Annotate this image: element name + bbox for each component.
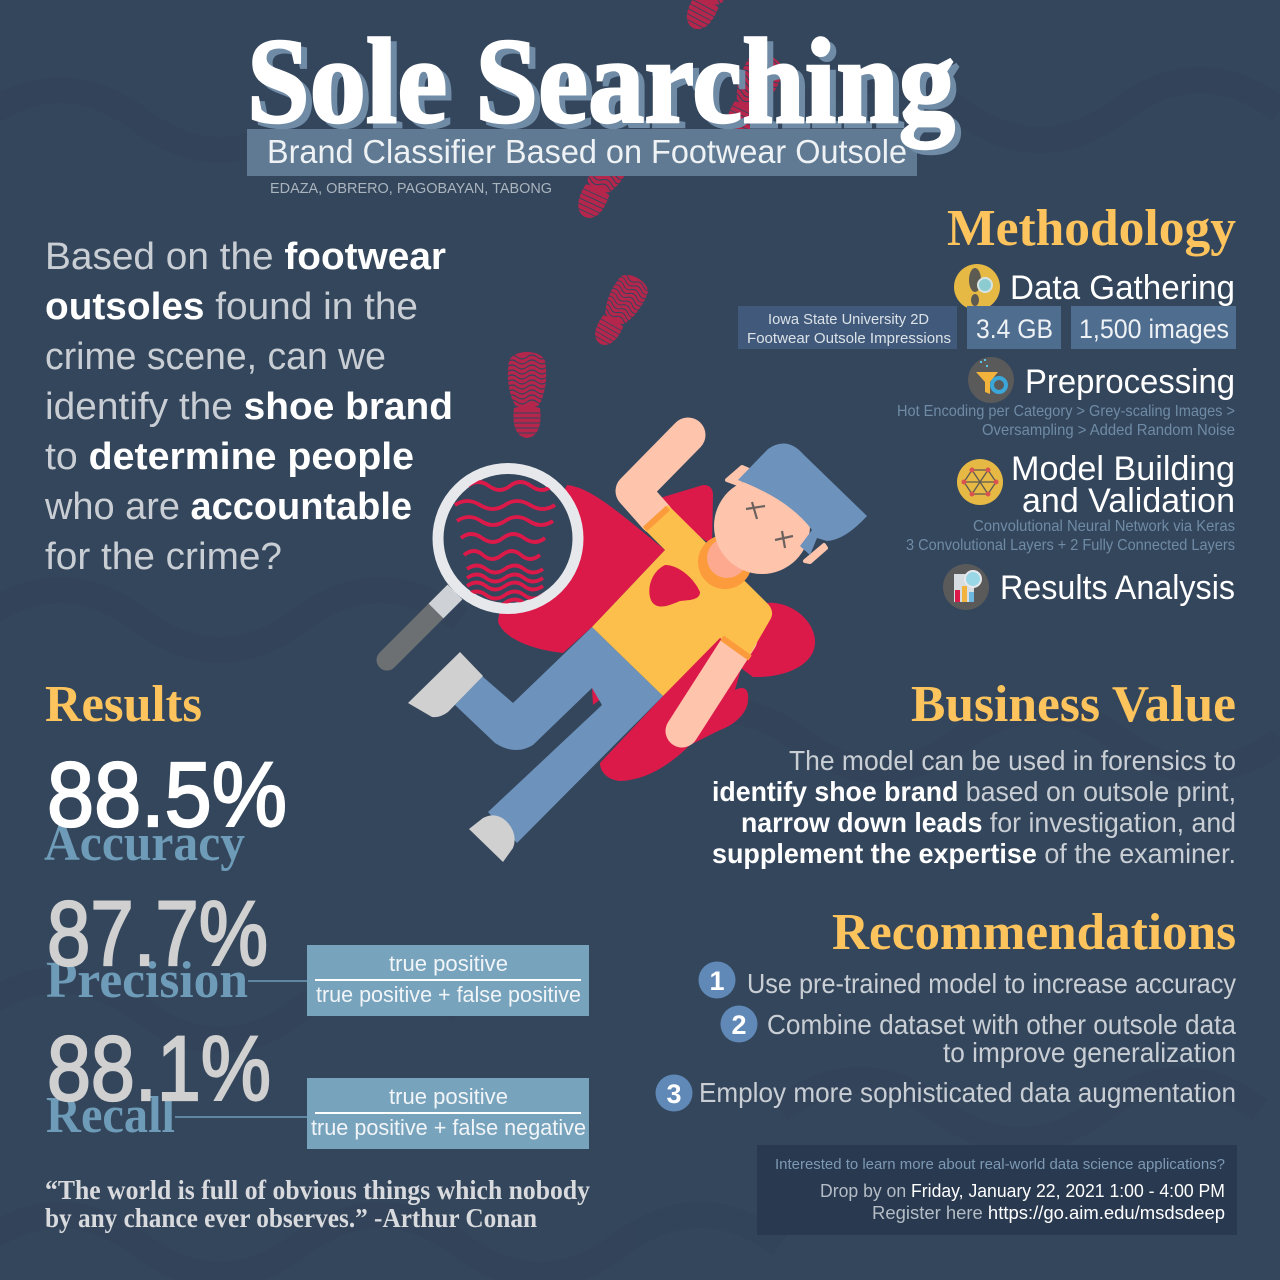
quote: “The world is full of obvious things which nobody [45,1175,590,1205]
step: data gathering: Data Gathering [1010,269,1235,307]
business value text: identify shoe brand based on outsole print, [712,776,1236,807]
metric: accuracy: Accuracy [44,815,245,872]
dataset source box: Iowa State University 2D [768,311,929,328]
legs [455,627,663,843]
recommendation 2: 2 [731,1010,747,1040]
dataset source box [738,306,957,349]
preprocessing details: Oversampling > Added Random Noise [982,422,1235,439]
neck [707,538,747,578]
model details: Convolutional Neural Network via Keras [973,518,1235,535]
recall formula [307,1078,589,1149]
sleeve cuffs [645,508,750,658]
recall connector [175,1116,307,1118]
dataset size box [967,306,1061,349]
dataset count box [1071,306,1236,349]
dataset size box: 3.4 GB [976,314,1053,344]
metric: recall: 88.1% [47,1018,271,1120]
precision formula: true positive [389,951,508,976]
quote: by any chance ever observes.” -Arthur Conan [45,1203,537,1233]
step: preprocessing: Preprocessing [1025,363,1235,401]
step: model building: Model Building [1011,450,1235,488]
recommendation 3: 3 [666,1079,682,1109]
icon: chart and lens [943,564,989,610]
heading: business value: Business Value [911,676,1236,733]
blood stain [649,565,700,607]
subtitle: Brand Classifier Based on Footwear Outsole [267,133,907,170]
research question [44,236,453,578]
precision connector [248,980,307,982]
heading: methodology: Methodology [947,200,1236,257]
authors: EDAZA, OBRERO, PAGOBAYAN, TABONG [270,180,552,197]
subtitle band [247,129,917,176]
event callout: Interested to learn more about real-world data science applications? [775,1156,1225,1173]
illustration: victim and blood [408,435,867,862]
research question: identify the shoe brand [45,386,453,428]
recommendation 2 [720,1006,1236,1068]
event callout: Register here https://go.aim.edu/msdsdeep [872,1203,1225,1223]
magnifying glass [387,468,578,660]
metric: precision: 87.7% [47,883,268,985]
recommendation 1: 1 [709,966,725,996]
shirt [592,505,772,696]
business value text: narrow down leads for investigation, and [741,807,1236,838]
title: Sole Searching [247,14,955,149]
dataset source box: Footwear Outsole Impressions [747,330,951,347]
hair [738,444,867,555]
recommendation 2: Combine dataset with other outsole data [767,1009,1236,1040]
model details: 3 Convolutional Layers + 2 Fully Connected Layers [906,537,1235,554]
research question: who are accountable [44,486,412,528]
step: model building: and Validation [1022,482,1235,520]
precision formula: true positive + false positive [316,982,581,1007]
business value text: supplement the expertise of the examiner. [712,838,1236,869]
step: model building [1011,450,1235,520]
business value text: The model can be used in forensics to [789,745,1236,776]
research question: for the crime? [45,536,282,578]
research question: Based on the footwear [45,236,446,278]
head [714,478,810,574]
lower arm [682,639,741,731]
recommendation 3: Employ more sophisticated data augmentation [699,1077,1236,1108]
precision formula [307,945,589,1016]
title: Sole Searching [253,19,961,154]
business value text [712,745,1236,869]
model details [906,518,1235,554]
metric: recall: Recall [46,1087,175,1144]
raised arm [633,435,688,517]
event callout: Drop by on Friday, January 22, 2021 1:00 - 4:00 PM [820,1181,1225,1201]
step: results analysis: Results Analysis [1000,569,1235,607]
recall formula: true positive [389,1084,508,1109]
footprints trail [507,0,788,438]
metric: precision: Precision [46,952,248,1009]
research question: crime scene, can we [45,336,386,378]
collar [698,535,752,589]
eyes [746,502,793,548]
event callout [757,1145,1237,1235]
recall formula: true positive + false negative [311,1115,586,1140]
ears [727,467,826,562]
recommendation 2: to improve generalization [943,1037,1236,1068]
icon: neural network [957,459,1003,505]
heading: recommendations: Recommendations [832,904,1236,961]
recommendation 1: Use pre-trained model to increase accuracy [747,968,1236,999]
shoes [408,652,483,717]
dataset count box: 1,500 images [1079,314,1229,344]
preprocessing details [897,403,1235,439]
heading: results: Results [45,676,202,733]
research question: outsoles found in the [45,286,418,328]
quote [45,1175,590,1233]
research question: to determine people [45,436,414,478]
icon: funnel and gear [968,357,1014,403]
blood pool [498,485,815,781]
preprocessing details: Hot Encoding per Category > Grey-scaling Images > [897,403,1235,420]
icon: footprint and lens [954,264,1000,310]
metric: accuracy: 88.5% [47,744,287,846]
